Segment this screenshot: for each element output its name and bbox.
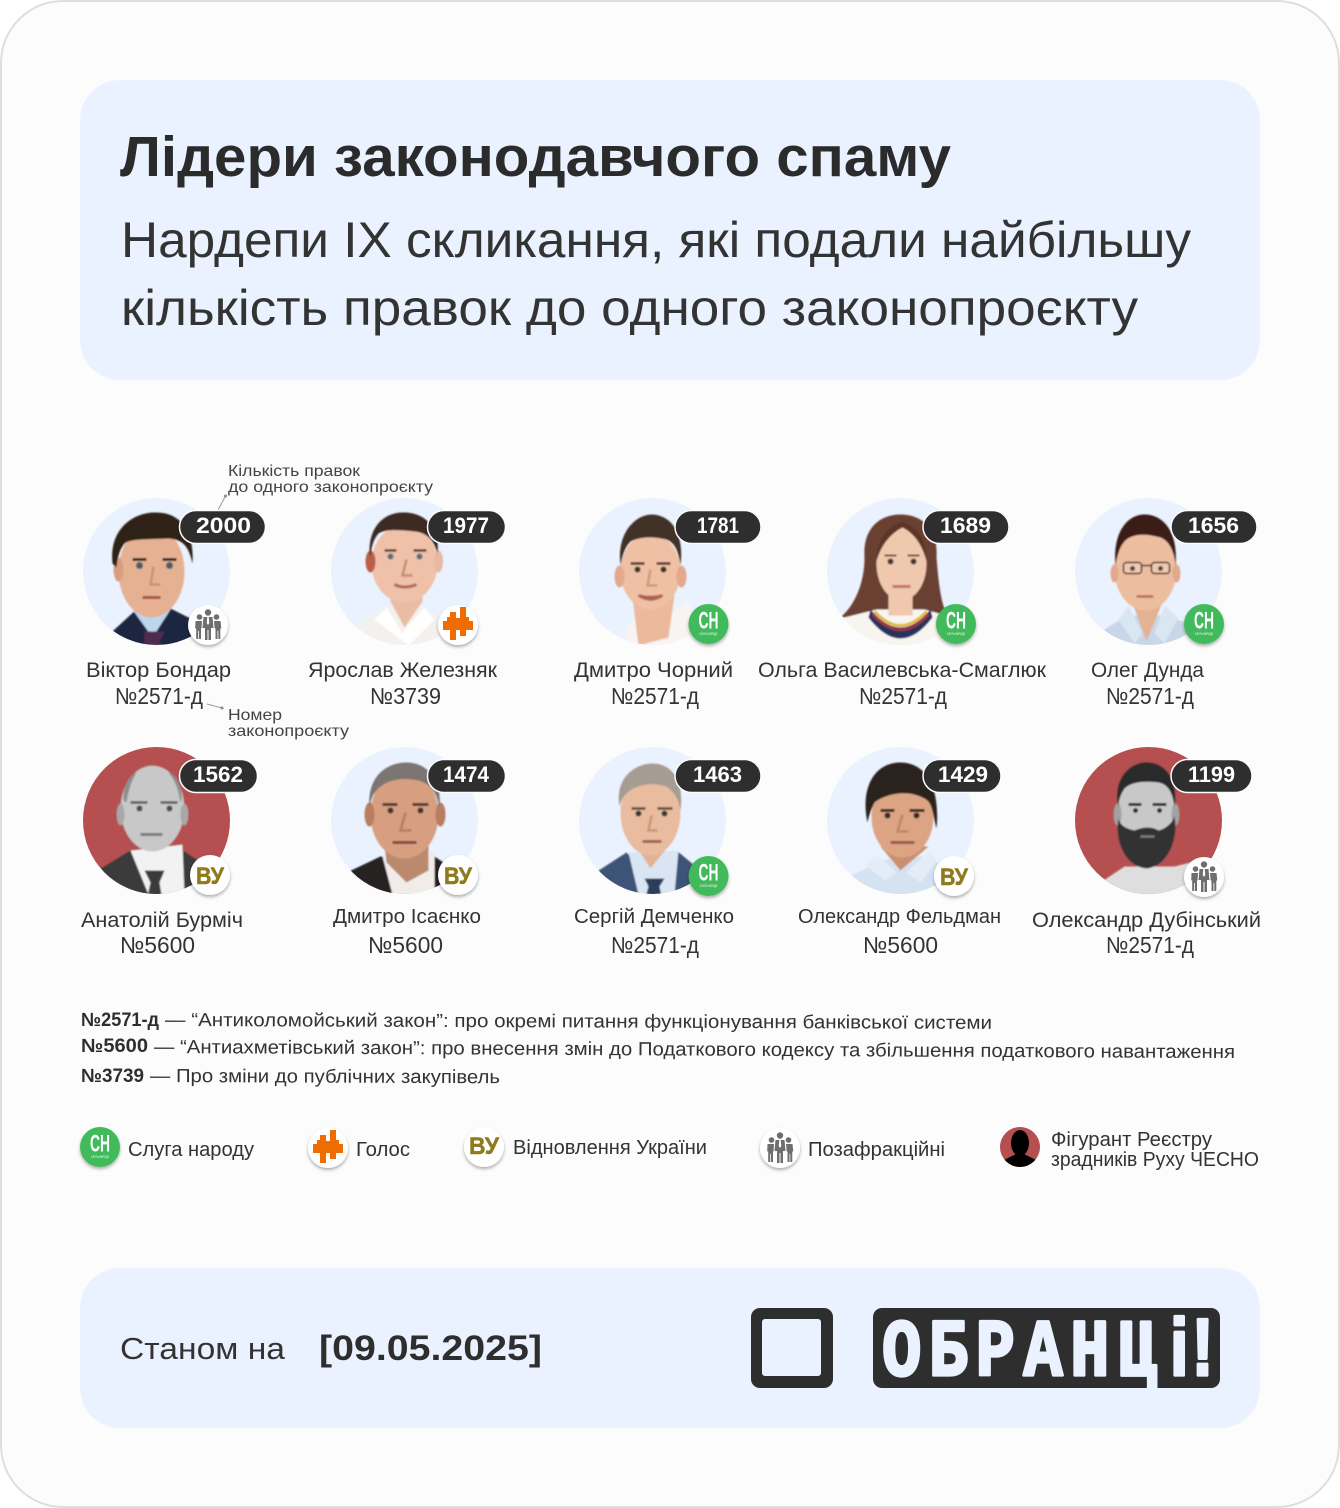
callout: number of amendments: до одного законопроєкту: [228, 479, 433, 496]
legend: Слуга народу: [80, 1127, 254, 1167]
name: Віктор Бондар: [86, 659, 231, 682]
legend: Слуга народу: СЛУГА НАРОДУ: [91, 1154, 109, 1159]
portrait: [83, 498, 230, 652]
count pill: [1171, 510, 1257, 544]
count pill: 1562: [193, 762, 243, 787]
legend: registry of traitors: [1000, 1127, 1259, 1171]
legend: Відновлення України: [464, 1127, 707, 1167]
date: [09.05.2025]: [319, 1329, 542, 1368]
legend: Голос: Голос: [356, 1139, 410, 1161]
bill notes: №5600: [81, 1036, 148, 1057]
count pill: [923, 510, 1009, 544]
bill: №5600: [863, 932, 938, 958]
portrait: [331, 747, 478, 900]
bill notes: — “Антиколомойський закон”: про окремі питання функціонування банківської системи: [165, 1010, 992, 1034]
party badge: СЛУГА НАРОДУ: [700, 631, 718, 636]
count pill: [923, 760, 1001, 792]
name: Олександр Фельдман: [798, 906, 1001, 928]
bill: №5600: [368, 932, 443, 958]
count pill: 1199: [1188, 762, 1235, 787]
party badge: [936, 604, 976, 644]
name: Ольга Василевська-Смаглюк: [758, 659, 1047, 682]
party badge: ВУ: [940, 864, 969, 891]
card: Сергій Демченко: [574, 747, 761, 958]
header panel: [80, 80, 1260, 380]
party badge: [1184, 604, 1224, 644]
name: Дмитро Ісаєнко: [333, 906, 481, 928]
portrait: [1075, 747, 1222, 900]
count pill: 1429: [938, 762, 988, 787]
party badge: ВУ: [196, 863, 225, 890]
party badge: СН: [698, 860, 718, 886]
count pill: [675, 510, 761, 544]
bill: №2571-д: [611, 683, 700, 709]
name: Олег Дунда: [1091, 659, 1204, 682]
subtitle: [121, 212, 1191, 336]
name: Ярослав Железняк: [308, 659, 498, 682]
party badge: ВУ: [444, 863, 473, 890]
bill notes: №2571-д: [81, 1010, 159, 1031]
party badge: [688, 856, 728, 896]
legend: Позафракційні: [760, 1128, 945, 1168]
callout: number of amendments: Кількість правок: [228, 463, 361, 480]
party badge: СН: [1194, 608, 1214, 634]
bill: №2571-д: [859, 683, 948, 709]
legend: registry of traitors: Фігурант Реєстру: [1051, 1129, 1212, 1151]
bill notes: [81, 1010, 1235, 1088]
callout: bill number: [207, 704, 349, 740]
count pill: [180, 510, 266, 544]
legend: Слуга народу: СН: [90, 1130, 110, 1158]
name: Сергій Демченко: [574, 906, 734, 928]
logo: checkbox: [751, 1308, 833, 1388]
bill: №3739: [370, 683, 441, 709]
card: Дмитро Чорний: [574, 498, 761, 709]
party badge: [438, 855, 478, 895]
party badge: [438, 605, 478, 645]
card: Дмитро Ісаєнко: [331, 747, 506, 958]
legend: Голос: [308, 1128, 410, 1168]
bill notes: №3739: [81, 1066, 144, 1087]
count pill: 1474: [443, 762, 490, 787]
legend: registry of traitors: зрадників Руху ЧЕСНО: [1051, 1149, 1259, 1171]
count pill: 1463: [693, 762, 742, 787]
logo: wordmark: ОБРАНЦ: [882, 1308, 1156, 1399]
count pill: [675, 760, 761, 792]
name: Дмитро Чорний: [574, 659, 733, 682]
party badge: СЛУГА НАРОДУ: [947, 631, 965, 636]
portrait: [579, 747, 726, 900]
card: Віктор Бондар: [83, 498, 266, 709]
date label: Станом на: [120, 1331, 286, 1366]
subtitle: Нардепи ІХ скликання, які подали найбільшу: [121, 212, 1191, 268]
bill notes: — Про зміни до публічних закупівель: [150, 1066, 500, 1088]
callout: bill number: законопроєкту: [228, 723, 349, 740]
party badge: [688, 604, 728, 644]
bill: №2571-д: [1106, 683, 1195, 709]
party badge: [188, 605, 228, 645]
count pill: [428, 760, 506, 792]
bill: №5600: [120, 932, 195, 958]
party badge: [190, 855, 230, 895]
callout: bill number: Номер: [228, 707, 282, 724]
portrait: [827, 498, 974, 652]
card: Анатолій Бурміч: [81, 747, 258, 958]
party badge: СН: [698, 608, 718, 634]
portrait: [827, 747, 974, 900]
portrait: [83, 747, 230, 900]
party badge: СЛУГА НАРОДУ: [1195, 631, 1213, 636]
legend: Відновлення України: Відновлення України: [513, 1137, 707, 1159]
legend: Позафракційні: Позафракційні: [808, 1139, 945, 1161]
count pill: 1656: [1188, 513, 1239, 538]
party badge: [934, 856, 974, 896]
count pill: [1171, 760, 1252, 792]
logo: wordmark: і!: [1170, 1302, 1213, 1393]
legend: Слуга народу: Слуга народу: [128, 1139, 254, 1161]
card: Олег Дунда: [1075, 498, 1257, 709]
count pill: [428, 510, 506, 544]
count pill: 1781: [697, 513, 739, 538]
bill: №2571-д: [611, 932, 700, 958]
footer panel: [80, 1268, 1260, 1428]
subtitle: кількість правок до одного законопроєкту: [121, 280, 1138, 336]
card: Ольга Василевська-Смаглюк: [758, 498, 1047, 709]
portrait: [331, 498, 478, 652]
portrait: [1075, 498, 1222, 652]
title: Лідери законодавчого спаму: [120, 125, 951, 189]
bill: №2571-д: [1106, 932, 1195, 958]
bill notes: — “Антиахметівський закон”: про внесення змін до Податкового кодексу та збільшення податкового навантаження: [154, 1037, 1235, 1063]
legend: Відновлення України: ВУ: [469, 1133, 500, 1160]
card: Ярослав Железняк: [308, 498, 506, 709]
count pill: 1689: [940, 513, 991, 538]
name: Олександр Дубінський: [1032, 909, 1261, 932]
party badge: СЛУГА НАРОДУ: [700, 883, 718, 888]
count pill: [180, 760, 258, 792]
legend: [80, 1127, 1259, 1171]
bill: №2571-д: [115, 683, 204, 709]
callout: number of amendments: [218, 463, 433, 510]
portrait: [579, 498, 726, 652]
count pill: 2000: [196, 513, 251, 538]
name: Анатолій Бурміч: [81, 909, 243, 932]
party badge: [1184, 857, 1224, 897]
party badge: СН: [946, 608, 966, 634]
card: Олександр Фельдман: [798, 747, 1001, 958]
card: Олександр Дубінський: [1032, 747, 1261, 958]
count pill: 1977: [443, 513, 489, 538]
